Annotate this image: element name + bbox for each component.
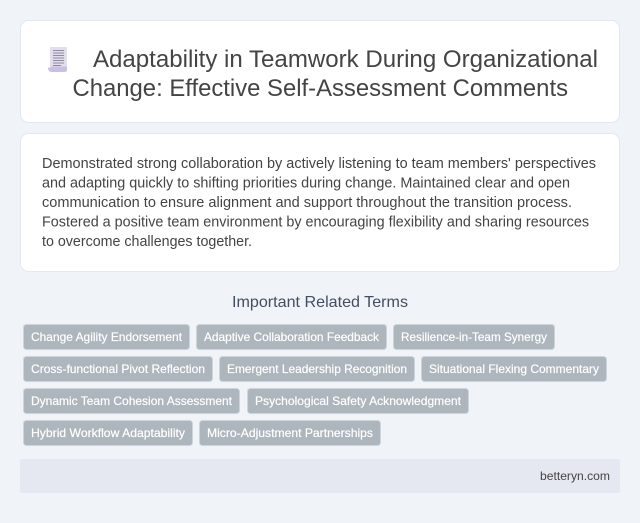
tag (394, 324, 554, 350)
tag: Hybrid Workflow Adaptability (31, 426, 185, 440)
panel: related term tags (24, 324, 606, 446)
text block: description: to overcome challenges together. (42, 234, 252, 250)
text block: description: Fostered a positive team environment by encouraging flexibility and sharing resources (42, 214, 589, 230)
text block: description: communication to ensure alignment and support throughout the transition process. (42, 195, 572, 211)
tag (24, 420, 192, 446)
text block: description: and adapting quickly to shifting priorities during change. Maintained clear and open (42, 176, 570, 192)
tag: Adaptive Collaboration Feedback (204, 330, 380, 344)
title: Change: Effective Self-Assessment Comments (72, 75, 568, 102)
tag: Emergent Leadership Recognition (227, 362, 407, 376)
text block: description (42, 156, 596, 250)
tag: Dynamic Team Cohesion Assessment (31, 394, 233, 408)
tag (200, 420, 380, 446)
tag (24, 324, 190, 350)
footer (20, 459, 620, 493)
tag: Situational Flexing Commentary (429, 362, 599, 376)
tag (220, 356, 414, 382)
tag: Micro-Adjustment Partnerships (207, 426, 373, 440)
tag (422, 356, 606, 382)
icon: document scroll (48, 47, 67, 72)
tag: Change Agility Endorsement (31, 330, 183, 344)
panel: description (20, 134, 620, 272)
tag (248, 388, 468, 414)
tag (24, 356, 212, 382)
tag (24, 388, 240, 414)
tag: Resilience-in-Team Synergy (401, 330, 547, 344)
tag (196, 324, 386, 350)
title: Adaptability in Teamwork During Organizational (93, 46, 598, 73)
panel: title header (20, 20, 620, 122)
tag: Psychological Safety Acknowledgment (255, 394, 462, 408)
title (72, 46, 598, 102)
tag: Cross-functional Pivot Reflection (31, 362, 205, 376)
text block: description: Demonstrated strong collaboration by actively listening to team members' perspectives (42, 156, 596, 172)
footer: betteryn.com (540, 469, 610, 483)
heading: important related terms: Important Related Terms (232, 294, 408, 311)
